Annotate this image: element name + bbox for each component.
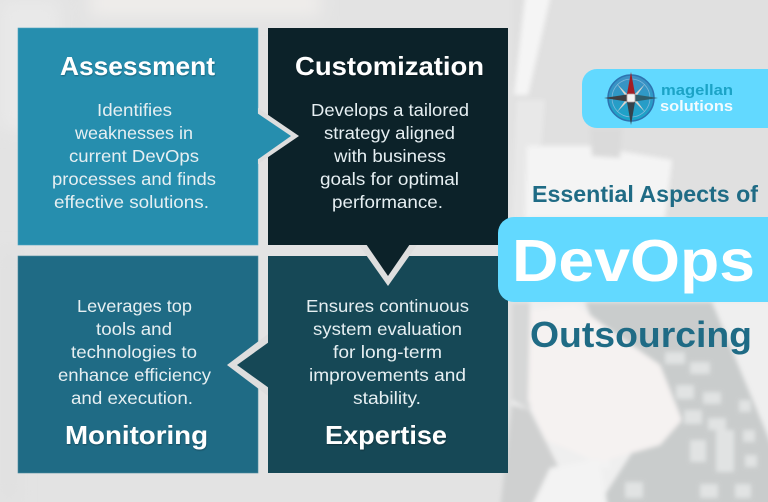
text block: customization description: strategy aligned [324,123,455,143]
text block: monitoring description: tools and [96,319,172,339]
arrow: expertise to monitoring [227,334,269,396]
panel: expertise [227,256,508,473]
text block: assessment description: effective solutions. [54,192,209,212]
logo wordmark: magellan [661,82,733,99]
text block: expertise description: for long-term [333,342,442,362]
panel: monitoring [18,256,258,473]
text block: expertise description: system evaluation [313,319,462,339]
heading: expertise: Expertise [325,420,447,450]
text block: assessment description: Identifies [97,100,172,120]
text block: assessment description: processes and finds [52,169,216,189]
icon: compass [604,72,658,125]
text block: monitoring description: technologies to [71,342,197,362]
heading: outsourcing: Outsourcing [530,314,752,355]
logo badge [582,69,768,128]
text block: expertise description: stability. [353,388,421,408]
panel: assessment [18,28,299,245]
text block: customization description [311,100,469,212]
text block: customization description: with business [333,146,446,166]
text block: customization description: Develops a tailored [311,100,469,120]
text block: customization description: performance. [332,192,443,212]
text block: monitoring description: enhance efficiency [58,365,211,385]
panel: customization [268,28,508,245]
text block: assessment description: weaknesses in [74,123,193,143]
heading: monitoring: Monitoring [65,420,208,450]
text block: expertise description: Ensures continuous [306,296,469,316]
text block: expertise description: improvements and [309,365,466,385]
heading: assessment: Assessment [60,51,215,81]
devops banner [498,217,768,302]
text block: assessment description [52,100,216,212]
logo wordmark: solutions [660,98,733,115]
arrow: assessment to customization [257,108,299,164]
text block: assessment description: current DevOps [69,146,199,166]
logo wordmark [660,82,733,115]
arrow: customization to expertise [359,244,417,286]
text block: monitoring description: and execution. [71,388,193,408]
text block: monitoring description [58,296,211,408]
text block: expertise description [306,296,469,408]
heading: customization: Customization [295,51,484,81]
heading: essential aspects of: Essential Aspects of [532,181,758,207]
text block: monitoring description: Leverages top [77,296,192,316]
text block: customization description: goals for optimal [320,169,459,189]
heading: devops: DevOps [512,228,755,294]
